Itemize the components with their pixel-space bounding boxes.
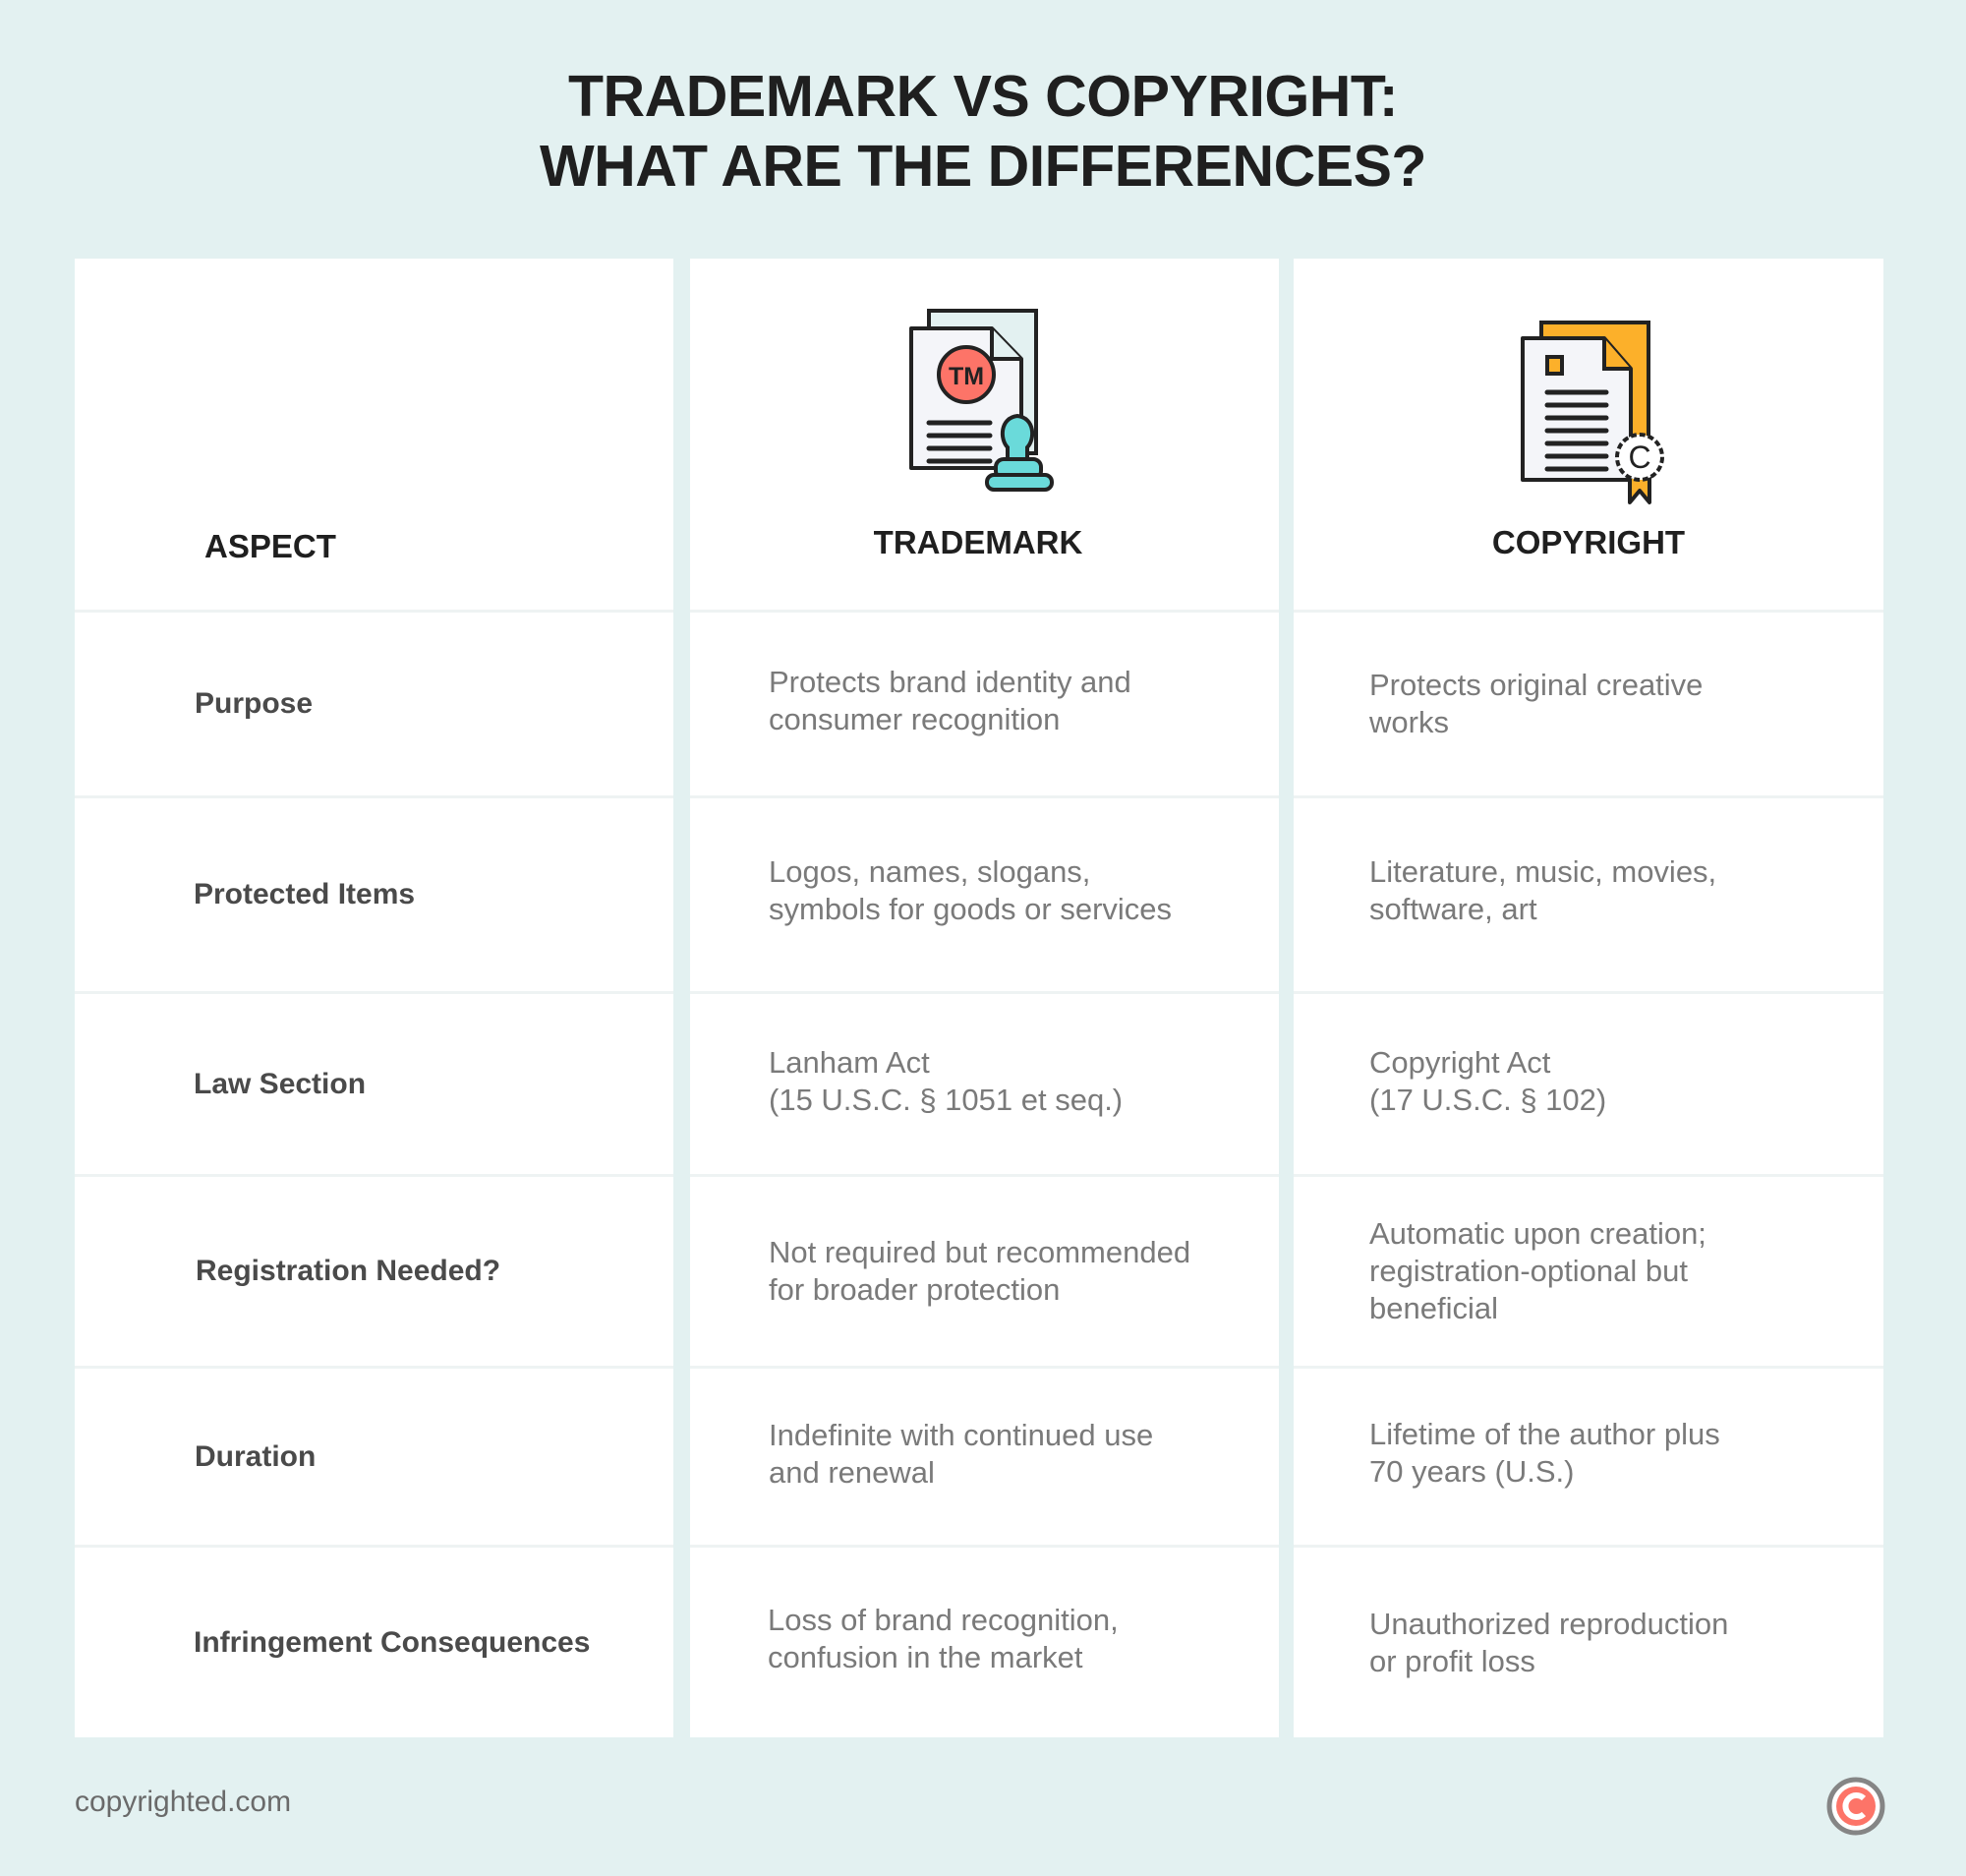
- label: duration: Duration: [195, 1439, 316, 1473]
- value: protected items: Literature, music, movies,: [1369, 854, 1716, 889]
- footer: site name: copyrighted.com: [75, 1786, 291, 1818]
- label: law section: Law Section: [194, 1068, 366, 1099]
- label: infringement: Infringement Consequences: [194, 1626, 590, 1658]
- icon: copyright logo: [1826, 1778, 1885, 1835]
- label: registration: Registration Needed?: [196, 1255, 500, 1287]
- value: purpose: Protects brand identity and: [769, 665, 1131, 699]
- value: law section: [690, 991, 1279, 1174]
- value: law section: [1294, 991, 1883, 1174]
- header: aspect: ASPECT: [204, 528, 336, 564]
- value: infringement: confusion in the market: [768, 1640, 1083, 1673]
- value: infringement: [1294, 1545, 1883, 1737]
- value: registration: Not required but recommended: [769, 1235, 1190, 1269]
- value: purpose: works: [1369, 705, 1449, 739]
- value: law section: (17 U.S.C. § 102): [1369, 1082, 1606, 1117]
- value: duration: [690, 1366, 1279, 1545]
- value: infringement: or profit loss: [1369, 1644, 1535, 1677]
- value: purpose: [690, 610, 1279, 795]
- value: duration: and renewal: [769, 1455, 935, 1489]
- label: law section: [75, 991, 673, 1174]
- label: registration: [75, 1174, 673, 1366]
- value: protected items: Logos, names, slogans,: [769, 854, 1090, 889]
- value: duration: [1294, 1366, 1883, 1545]
- value: duration: 70 years (U.S.): [1369, 1453, 1574, 1489]
- value: registration: [690, 1174, 1279, 1366]
- value: purpose: [1294, 610, 1883, 795]
- value: protected items: [1294, 795, 1883, 991]
- value: infringement: [690, 1545, 1279, 1737]
- panel: aspect column: [75, 259, 673, 1737]
- value: purpose: Protects original creative: [1369, 668, 1703, 702]
- panel: copyright column: [1294, 259, 1883, 1737]
- value: protected items: symbols for goods or services: [769, 892, 1172, 926]
- icon: copyright certificate: C: [1628, 440, 1651, 475]
- title: WHAT ARE THE DIFFERENCES?: [540, 134, 1426, 199]
- label: infringement: [75, 1545, 673, 1737]
- header: copyright: COPYRIGHT: [1492, 524, 1685, 560]
- label: purpose: [75, 610, 673, 795]
- icon: trademark document with stamp: TM: [949, 363, 984, 390]
- label: protected items: [75, 795, 673, 991]
- title: [540, 64, 1426, 199]
- title: TRADEMARK VS COPYRIGHT:: [568, 64, 1398, 129]
- value: registration: for broader protection: [769, 1272, 1060, 1307]
- label: duration: [75, 1366, 673, 1545]
- value: protected items: [690, 795, 1279, 991]
- value: law section: Copyright Act: [1369, 1044, 1550, 1080]
- icon: trademark document with stamp: [909, 309, 1054, 492]
- value: duration: Indefinite with continued use: [769, 1418, 1153, 1451]
- panel: trademark column: [690, 259, 1279, 1737]
- value: protected items: software, art: [1369, 892, 1537, 926]
- value: law section: (15 U.S.C. § 1051 et seq.): [769, 1082, 1123, 1117]
- value: registration: Automatic upon creation;: [1369, 1216, 1706, 1251]
- value: duration: Lifetime of the author plus: [1369, 1416, 1720, 1451]
- value: registration: registration-optional but: [1369, 1254, 1688, 1288]
- value: registration: [1294, 1174, 1883, 1366]
- header: trademark: TRADEMARK: [874, 524, 1082, 560]
- value: infringement: Loss of brand recognition,: [768, 1603, 1119, 1636]
- value: registration: beneficial: [1369, 1291, 1498, 1325]
- value: purpose: consumer recognition: [769, 702, 1060, 736]
- value: law section: Lanham Act: [769, 1044, 930, 1080]
- icon: copyright certificate: [1521, 321, 1664, 505]
- label: purpose: Purpose: [195, 687, 313, 720]
- value: infringement: Unauthorized reproduction: [1369, 1607, 1728, 1640]
- label: protected items: Protected Items: [194, 878, 415, 910]
